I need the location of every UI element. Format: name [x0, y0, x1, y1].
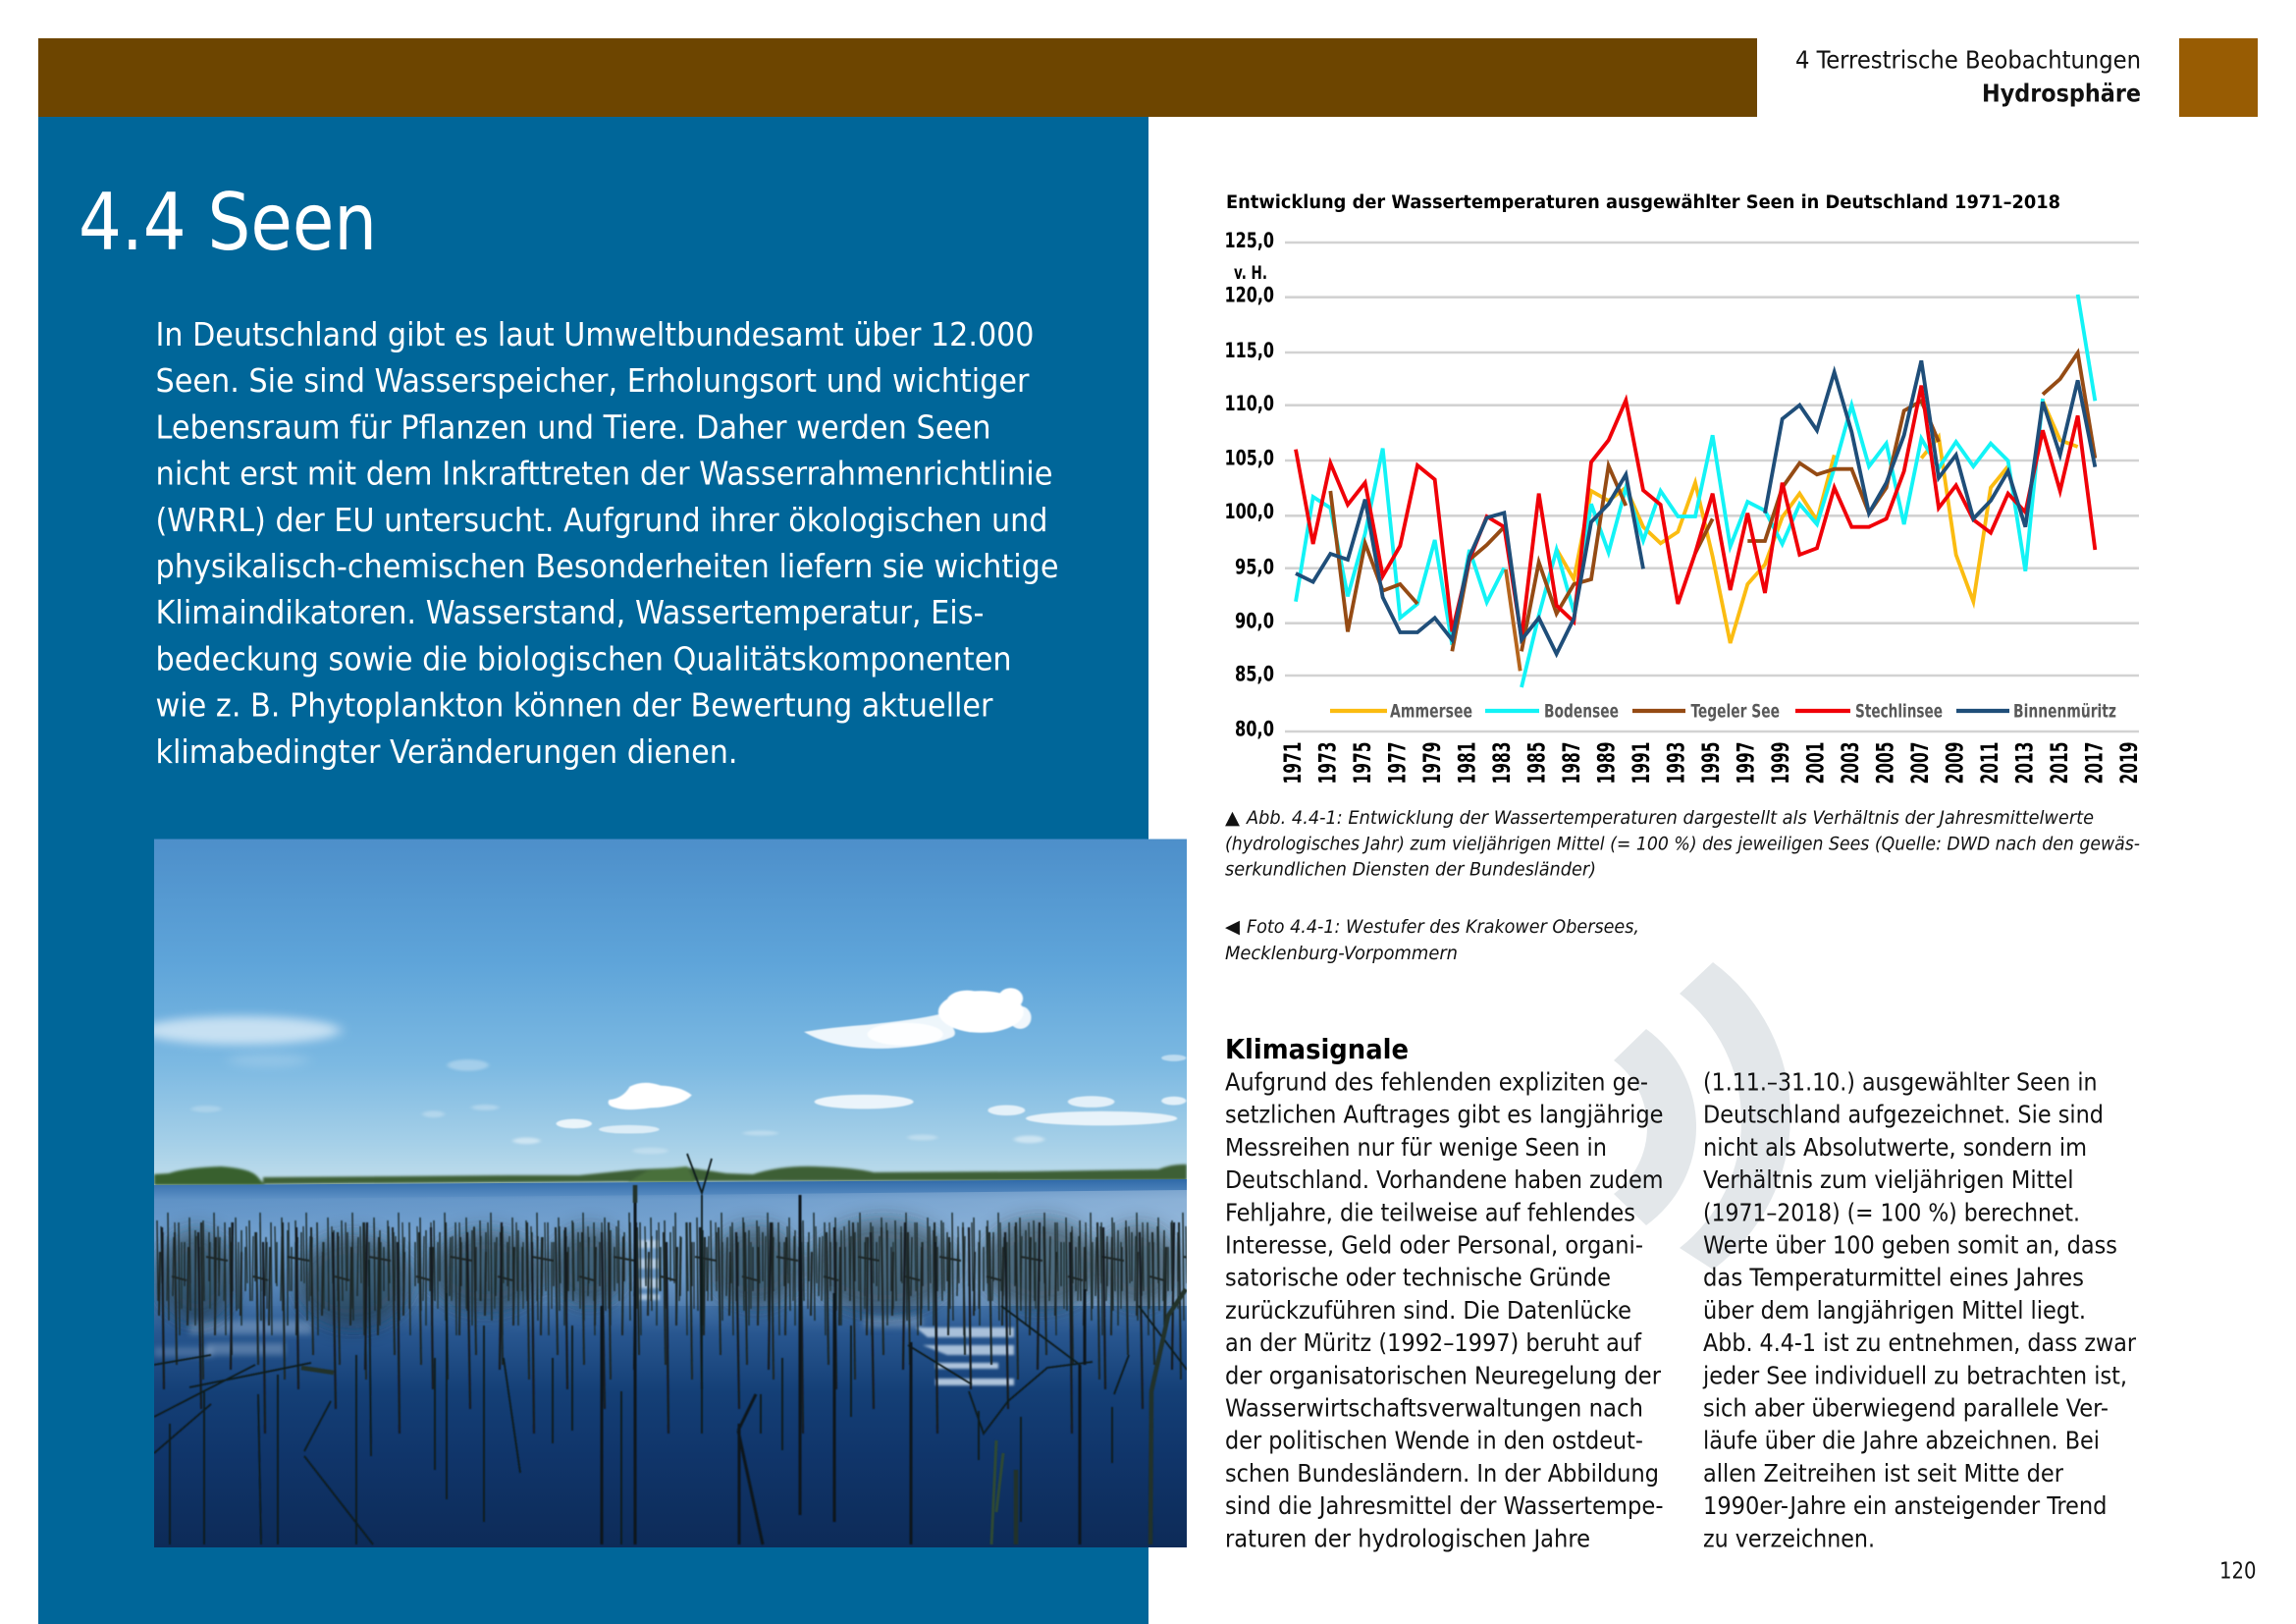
text column 2: allen Zeitreihen ist seit Mitte der: [1703, 1459, 2064, 1488]
x axis labels: 2003: [1837, 742, 1864, 784]
x axis labels: 2009: [1942, 742, 1969, 784]
text column 2: Werte über 100 geben somit an, dass: [1703, 1231, 2117, 1259]
sky: [141, 839, 1187, 1186]
intro text: nicht erst mit dem Inkrafttreten der Wasserrahmenrichtlinie: [155, 455, 1052, 493]
text column 2: zu verzeichnen.: [1703, 1524, 1875, 1552]
x axis labels: 1997: [1732, 742, 1759, 784]
y axis labels: 105,0: [1225, 446, 1274, 469]
legend: Ammersee: [1390, 701, 1472, 723]
x axis labels: 1985: [1523, 742, 1551, 784]
data lines: [1296, 295, 2095, 687]
legend: Stechlinsee: [1855, 701, 1943, 723]
y axis labels: 80,0: [1235, 717, 1274, 740]
header accent square: [2179, 38, 2258, 117]
x axis labels: 1993: [1663, 742, 1690, 784]
text column 2: Verhältnis zum vieljährigen Mittel: [1703, 1165, 2073, 1194]
y axis labels: [1225, 229, 1274, 740]
series: Bodensee: [1296, 295, 2095, 687]
y axis labels: 115,0: [1225, 339, 1274, 362]
text column 1: sind die Jahresmittel der Wassertempe-: [1225, 1491, 1663, 1520]
caption: Abb. 4.4-1: [1225, 807, 2140, 880]
text column 1: Deutschland. Vorhandene haben zudem: [1225, 1165, 1663, 1194]
legend: Tegeler See: [1690, 701, 1780, 723]
x axis labels: 2015: [2046, 742, 2073, 784]
text column 1: Messreihen nur für wenige Seen in: [1225, 1133, 1607, 1162]
caption: Abb. 4.4-1: (hydrologisches Jahr) zum vieljährigen Mittel (= 100 %) des jeweiligen Sees (Quelle: DWD nach den gewäs-: [1225, 833, 2140, 854]
x axis labels: 1989: [1592, 742, 1620, 784]
intro text: Klimaindikatoren. Wasserstand, Wassertemperatur, Eis-: [155, 593, 985, 631]
x axis labels: 2005: [1871, 742, 1898, 784]
intro text: wie z. B. Phytoplankton können der Bewertung aktueller: [155, 686, 993, 725]
title: 4.4 Seen: [79, 177, 377, 268]
panel: blue intro: [38, 117, 1148, 1624]
caption: Abb. 4.4-1: ▲: [1225, 807, 1241, 829]
intro text: [155, 315, 1058, 771]
page number: 120: [2219, 1559, 2256, 1585]
caption: Abb. 4.4-1: serkundlichen Diensten der Bundesländer): [1225, 858, 1596, 880]
reeds: [154, 1154, 1187, 1544]
text column 1: der politischen Wende in den ostdeut-: [1225, 1427, 1643, 1455]
x axis labels: 2001: [1802, 742, 1830, 784]
caption: Foto 4.4-1: Foto 4.4-1: Westufer des Krakower Obersees,: [1247, 916, 1639, 938]
text column 2: sich aber überwiegend parallele Ver-: [1703, 1394, 2109, 1422]
series: Tegeler See: [1330, 352, 2095, 671]
icon: quotation mark watermark: [1614, 962, 1790, 1270]
water: [154, 1179, 1187, 1547]
cloud reflections: [154, 1240, 1014, 1385]
text column 1: schen Bundesländern. In der Abbildung: [1225, 1459, 1659, 1488]
intro text: physikalisch-chemischen Besonderheiten liefern sie wichtige: [155, 547, 1058, 585]
series: Ammersee: [1557, 401, 2078, 643]
x axis labels: 1977: [1384, 742, 1412, 784]
caption: Foto 4.4-1: ◀: [1225, 916, 1241, 938]
y axis labels: 125,0: [1225, 229, 1274, 252]
text column 2: nicht als Absolutwerte, sondern im: [1703, 1133, 2087, 1162]
text column 2: Deutschland aufgezeichnet. Sie sind: [1703, 1101, 2104, 1129]
heading: Klimasignale: Klimasignale: [1225, 1033, 1409, 1065]
text column 1: zurückzuführen sind. Die Datenlücke: [1225, 1296, 1631, 1325]
photo: Westufer des Krakower Obersees: [141, 839, 1187, 1547]
x axis labels: 1979: [1418, 742, 1446, 784]
text column 2: (1.11.–31.10.) ausgewählter Seen in: [1703, 1068, 2097, 1096]
caption: Abb. 4.4-1: Abb. 4.4-1: Entwicklung der Wassertemperaturen dargestellt als Verhältnis der Jahresmittelwerte: [1246, 807, 2094, 829]
x axis labels: 1995: [1697, 742, 1725, 784]
text column 2: 1990er-Jahre ein ansteigender Trend: [1703, 1491, 2107, 1520]
chart title: Entwicklung der Wassertemperaturen ausgewählter Seen in Deutschland 1971–2018: [1226, 192, 2060, 213]
text column 2: Abb. 4.4-1 ist zu entnehmen, dass zwar: [1703, 1328, 2137, 1357]
y axis labels: v. H.: [1234, 262, 1267, 284]
legend: [1330, 701, 2116, 723]
legend: Binnenmüritz: [2013, 701, 2116, 723]
x axis labels: 2013: [2010, 742, 2038, 784]
header bar: [38, 38, 1757, 117]
y axis labels: 120,0: [1225, 283, 1274, 306]
intro text: Seen. Sie sind Wasserspeicher, Erholungsort und wichtiger: [155, 361, 1030, 400]
x axis labels: 2019: [2115, 742, 2143, 784]
x axis labels: 1975: [1349, 742, 1376, 784]
x axis labels: 1983: [1488, 742, 1516, 784]
x axis labels: 1999: [1767, 742, 1794, 784]
text column 1: [1225, 1068, 1663, 1552]
intro text: bedeckung sowie die biologischen Qualitätskomponenten: [155, 639, 1011, 677]
intro text: (WRRL) der EU untersucht. Aufgrund ihrer ökologischen und: [155, 501, 1048, 539]
text column 1: Fehljahre, die teilweise auf fehlendes: [1225, 1198, 1635, 1226]
y axis labels: 110,0: [1225, 392, 1274, 415]
y axis labels: 95,0: [1235, 556, 1274, 579]
caption: Foto 4.4-1: [1225, 916, 1639, 964]
text column 2: über dem langjährigen Mittel liegt.: [1703, 1296, 2086, 1325]
text column 1: satorische oder technische Gründe: [1225, 1264, 1611, 1292]
x axis labels: 2011: [1976, 742, 2003, 784]
x axis labels: 1981: [1453, 742, 1480, 784]
text column 1: setzlichen Auftrages gibt es langjährige: [1225, 1101, 1663, 1129]
x axis labels: 1973: [1313, 742, 1341, 784]
series: Stechlinsee: [1296, 386, 2095, 638]
intro text: In Deutschland gibt es laut Umweltbundesamt über 12.000: [155, 315, 1035, 353]
text column 1: raturen der hydrologischen Jahre: [1225, 1524, 1590, 1552]
header text: [1795, 45, 2141, 108]
x axis labels: 2017: [2081, 742, 2109, 784]
treeline: [154, 1164, 1187, 1185]
header text: Hydrosphäre: [1982, 79, 2141, 108]
text column 2: das Temperaturmittel eines Jahres: [1703, 1264, 2084, 1292]
header text: 4 Terrestrische Beobachtungen: [1795, 45, 2141, 75]
x axis labels: [1279, 742, 2143, 784]
x axis labels: 2007: [1906, 742, 1934, 784]
text column 1: der organisatorischen Neuregelung der: [1225, 1361, 1662, 1389]
intro text: klimabedingter Veränderungen dienen.: [155, 732, 738, 771]
y axis labels: 90,0: [1235, 609, 1274, 632]
x axis labels: 1991: [1628, 742, 1655, 784]
text column 2: [1702, 1068, 2137, 1552]
intro text: Lebensraum für Pflanzen und Tiere. Daher werden Seen: [155, 407, 991, 446]
line chart: Wassertemperaturen: [1225, 229, 2143, 784]
legend: Bodensee: [1544, 701, 1619, 723]
y axis labels: 100,0: [1225, 500, 1274, 523]
text column 2: (1971–2018) (= 100 %) berechnet.: [1703, 1198, 2080, 1226]
y axis labels: 85,0: [1235, 662, 1274, 685]
text column 1: Interesse, Geld oder Personal, organi-: [1225, 1231, 1643, 1259]
series: Binnenmüritz: [1296, 360, 2095, 654]
text column 1: Aufgrund des fehlenden expliziten ge-: [1225, 1068, 1648, 1096]
text column 1: an der Müritz (1992–1997) beruht auf: [1225, 1328, 1642, 1357]
x axis labels: 1971: [1279, 742, 1307, 784]
caption: Foto 4.4-1: Mecklenburg-Vorpommern: [1225, 943, 1458, 964]
x axis labels: 1987: [1558, 742, 1585, 784]
text column 1: Wasserwirtschaftsverwaltungen nach: [1225, 1394, 1643, 1422]
text column 2: jeder See individuell zu betrachten ist,: [1702, 1361, 2127, 1389]
text column 2: läufe über die Jahre abzeichnen. Bei: [1703, 1427, 2100, 1455]
